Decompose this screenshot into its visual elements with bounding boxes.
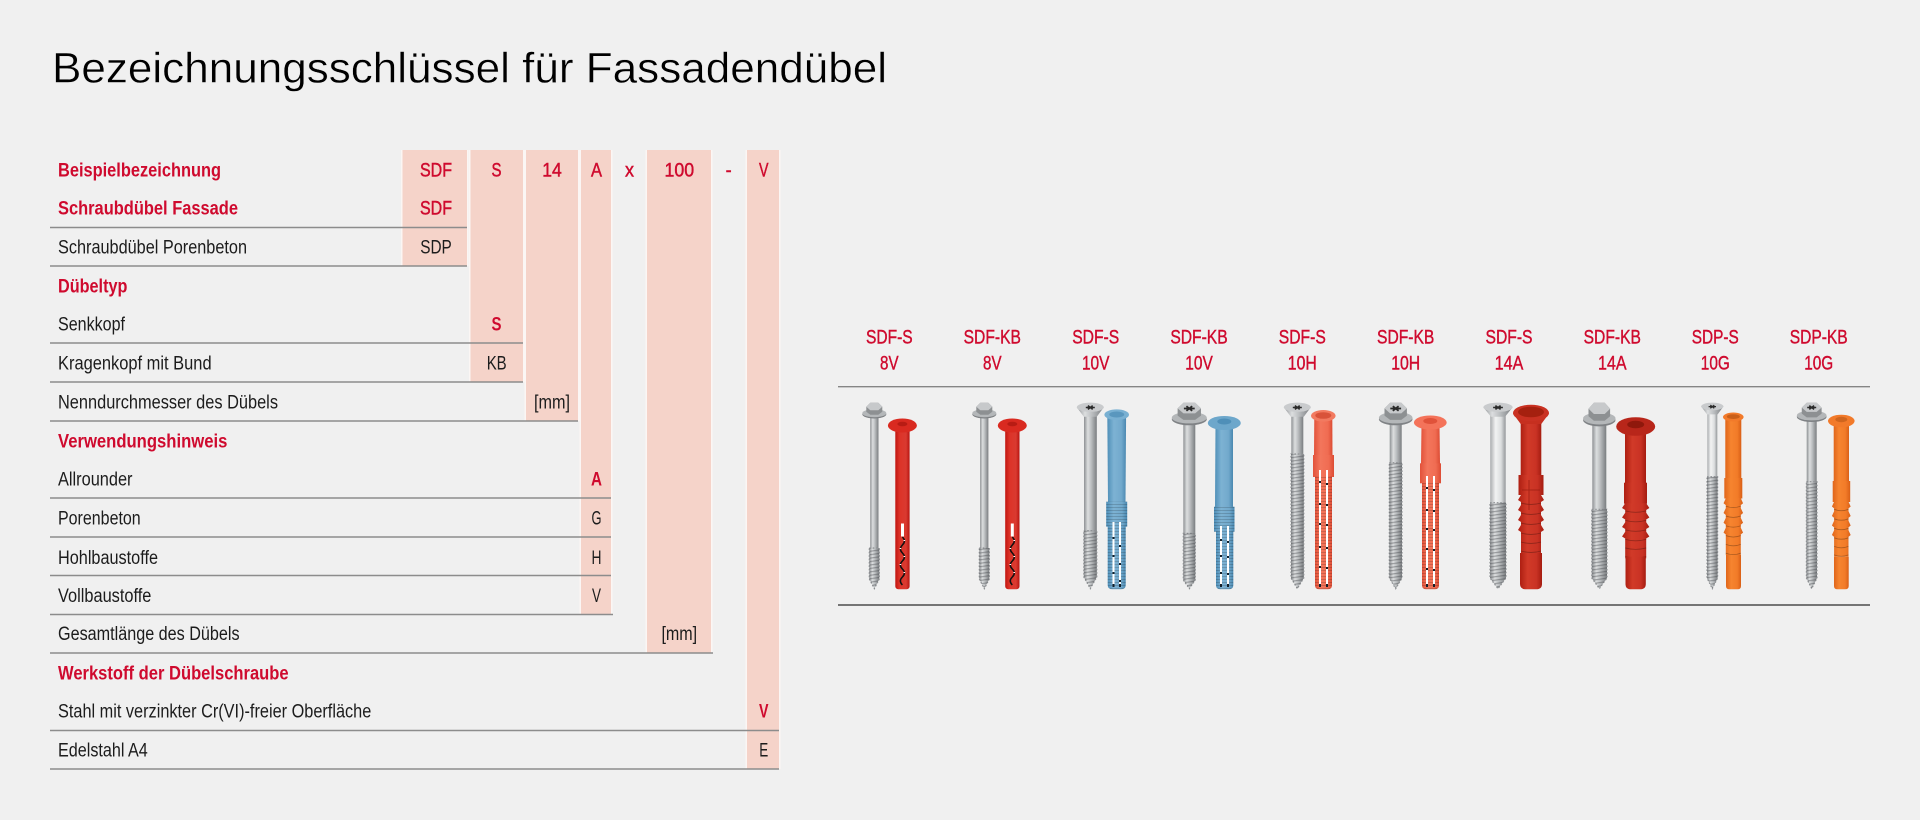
dowel: [1513, 405, 1549, 589]
product: SDF-S 8V: 8V: [880, 353, 899, 374]
product: SDF-S 14A: 14A: [1495, 353, 1524, 374]
product: SDF-S 10V: [1072, 327, 1129, 589]
screw: [1583, 403, 1616, 589]
screw: [1701, 403, 1723, 589]
row: Stahl: [58, 702, 769, 722]
dowel: [1311, 410, 1336, 589]
product rules: [838, 387, 1870, 605]
row: Beispielbezeichnung: A: [591, 160, 602, 181]
row: Kragenkopf mit Bund: Kragenkopf mit Bund: [58, 354, 212, 374]
row: Beispielbezeichnung: -: [726, 160, 732, 181]
product: SDF-S 14A: SDF-S: [1486, 327, 1532, 348]
row: Edelstahl: [58, 740, 768, 762]
row: Stahl: V: [759, 702, 769, 722]
row: Vollbaustoffe: [58, 586, 601, 607]
row: Beispielbezeichnung: 14: [542, 160, 562, 181]
dowel: [1723, 412, 1744, 589]
row: Vollbaustoffe: V: [592, 586, 601, 607]
panel: designation key table: [50, 150, 780, 769]
screw: [1483, 403, 1513, 589]
row: Senkkopf: Senkkopf: [58, 314, 126, 335]
product: SDF-S 10H: [1279, 327, 1336, 589]
product: SDF-S 10V: 10V: [1082, 353, 1110, 374]
table column bands: [401, 150, 780, 769]
row: Kragenkopf mit Bund: KB: [487, 354, 507, 374]
heading: Verwendungshinweis: Verwendungshinweis: [58, 431, 227, 452]
row: Schraubdübel Porenbeton: [58, 238, 452, 258]
dowel: [1616, 417, 1655, 589]
row: Schraubdübel Fassade: SDF: [420, 198, 452, 219]
row: Hohlbaustoffe: H: [592, 548, 602, 569]
product: SDP-S 10G: 10G: [1701, 353, 1730, 374]
row: Beispielbezeichnung: x: [625, 160, 634, 181]
product: SDF-KB 8V: 8V: [983, 353, 1002, 374]
product: SDF-KB 14A: SDF-KB: [1584, 327, 1641, 348]
screw: [1797, 403, 1827, 589]
screw: [1284, 403, 1311, 589]
product: SDF-KB 10H: [1377, 327, 1447, 589]
dowel: [1104, 409, 1129, 589]
row: Hohlbaustoffe: Hohlbaustoffe: [58, 548, 158, 569]
row: Porenbeton: G: [592, 508, 602, 530]
product: SDF-KB 10H: 10H: [1391, 353, 1420, 374]
product: SDP-S 10G: [1692, 327, 1744, 589]
screw: [972, 403, 996, 589]
product: SDF-KB 14A: [1583, 327, 1655, 589]
product: SDF-KB 10V: 10V: [1185, 353, 1213, 374]
row: Beispielbezeichnung: V: [759, 160, 769, 181]
row: Senkkopf: S: [492, 314, 502, 335]
product: SDF-KB 10V: [1170, 327, 1241, 589]
table rules: [50, 228, 779, 769]
product: SDF-S 8V: SDF-S: [866, 327, 913, 348]
row: Vollbaustoffe: Vollbaustoffe: [58, 586, 151, 607]
title: Bezeichnungsschlüssel für Fassadendübel: [52, 44, 887, 92]
row: Nenndurchmesser: [mm]: [534, 392, 570, 414]
heading: Dübeltyp: Dübeltyp: [58, 276, 127, 297]
product: SDF-KB 10V: SDF-KB: [1170, 327, 1228, 348]
product: SDP-S 10G: SDP-S: [1692, 327, 1739, 348]
row: Beispielbezeichnung: [58, 160, 769, 181]
row: Beispielbezeichnung: 100: [664, 160, 694, 181]
dowel: [998, 418, 1027, 589]
product: SDF-S 10H: SDF-S: [1279, 327, 1326, 348]
row: Kragenkopf mit Bund: [58, 354, 507, 374]
heading: Werkstoff: Werkstoff der Dübelschraube: [58, 664, 289, 685]
row: Schraubdübel Porenbeton: SDP: [420, 238, 452, 258]
row: Edelstahl: Edelstahl A4: [58, 740, 148, 762]
row: Gesamtlänge: [58, 624, 697, 645]
dowel: [1414, 416, 1447, 589]
row: Gesamtlänge: [mm]: [661, 624, 697, 645]
row: Hohlbaustoffe: [58, 548, 602, 569]
product: SDP-KB 10G: SDP-KB: [1790, 327, 1848, 348]
row: Beispielbezeichnung: SDF: [420, 160, 452, 181]
row: Allrounder: [58, 470, 602, 490]
product: SDF-KB 8V: SDF-KB: [964, 327, 1021, 348]
screw: [1172, 403, 1207, 589]
product: SDF-KB 14A: 14A: [1598, 353, 1627, 374]
row: Porenbeton: [58, 508, 602, 530]
screw: [862, 403, 886, 589]
product: SDF-S 8V: [862, 327, 917, 589]
row: Nenndurchmesser: Nenndurchmesser des Dübels: [58, 392, 278, 414]
product: SDF-S 10H: 10H: [1288, 353, 1317, 374]
screw: [1379, 403, 1412, 589]
row: Beispielbezeichnung: Beispielbezeichnung: [58, 160, 221, 181]
dowel: [1828, 415, 1855, 589]
row: Schraubdübel Porenbeton: Schraubdübel Porenbeton: [58, 238, 247, 258]
row: Nenndurchmesser: [58, 392, 570, 414]
row: Porenbeton: Porenbeton: [58, 508, 141, 530]
row: Gesamtlänge: Gesamtlänge des Dübels: [58, 624, 240, 645]
product: SDP-KB 10G: 10G: [1804, 353, 1833, 374]
row: Schraubdübel Fassade: [58, 198, 452, 219]
product: SDF-KB 10H: SDF-KB: [1377, 327, 1434, 348]
row: Beispielbezeichnung: S: [492, 160, 502, 181]
row: Schraubdübel Fassade: Schraubdübel Fassade: [58, 198, 238, 219]
panel: product overview: [838, 327, 1870, 605]
dowel: [1208, 416, 1241, 589]
row: Stahl: Stahl mit verzinkter Cr(VI)-freier Oberfläche: [58, 702, 371, 722]
screw: [1077, 403, 1104, 589]
product: SDF-S 14A: [1483, 327, 1549, 589]
product: SDF-KB 8V: [964, 327, 1027, 589]
row: Allrounder: Allrounder: [58, 470, 133, 490]
product: SDF-S 10V: SDF-S: [1072, 327, 1119, 348]
row: Edelstahl: E: [759, 740, 768, 762]
dowel: [888, 418, 917, 589]
row: Senkkopf: [58, 314, 502, 335]
product: SDP-KB 10G: [1790, 327, 1855, 589]
row: Allrounder: A: [591, 470, 602, 490]
